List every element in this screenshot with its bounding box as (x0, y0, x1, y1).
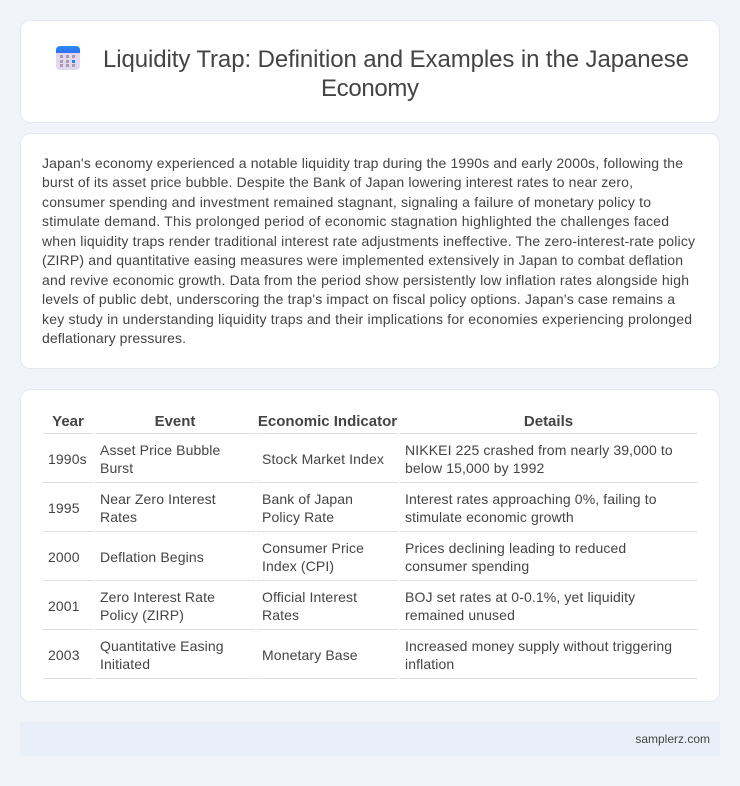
row 1990s: 1990s (48, 451, 87, 467)
data table: Monetary Base (262, 647, 358, 663)
data table: Prices declining leading to reduced (405, 540, 626, 556)
data table: Zero Interest Rate (100, 589, 215, 605)
data table (43, 413, 697, 679)
title: Economy (321, 75, 419, 102)
header: Year: Year (52, 413, 84, 430)
data table: below 15,000 by 1992 (405, 460, 544, 476)
row 2000: 2000 (48, 549, 80, 565)
data table: Rates (262, 607, 299, 623)
data table: Bank of Japan (262, 491, 353, 507)
data table: Initiated (100, 656, 150, 672)
footer credit: samplerz.com (635, 732, 710, 746)
data table: Asset Price Bubble (100, 442, 220, 458)
data table: BOJ set rates at 0-0.1%, yet liquidity (405, 589, 635, 605)
data table: Interest rates approaching 0%, failing to (405, 491, 657, 507)
summary text: consumer spending and investment remained stagnant, signaling a failure of monetary policy to (42, 194, 651, 210)
data table: Policy Rate (262, 509, 334, 525)
row 2003: 2003 (48, 647, 80, 663)
data table: consumer spending (405, 558, 529, 574)
summary text: Japan's economy experienced a notable liquidity trap during the 1990s and early 2000s, following the (42, 155, 683, 171)
data table: Near Zero Interest (100, 491, 216, 507)
header: Event: Event (155, 413, 195, 430)
data table: Index (CPI) (262, 558, 334, 574)
data table: inflation (405, 656, 454, 672)
row 2001: 2001 (48, 598, 80, 614)
icon: calendar (56, 46, 80, 70)
data table: Burst (100, 460, 133, 476)
footer bar (20, 722, 720, 756)
summary text: key study in understanding liquidity traps and their implications for economies experiencing prolonged (42, 311, 692, 327)
summary panel (20, 133, 720, 369)
data table: Rates (100, 509, 137, 525)
summary text: levels of public debt, underscoring the trap's impact on fiscal policy options. Japan's case remains a (42, 291, 675, 307)
data table: stimulate economic growth (405, 509, 574, 525)
data table: Quantitative Easing (100, 638, 224, 654)
summary text: stimulate demand. This prolonged period of economic stagnation highlighted the challenges faced (42, 213, 669, 229)
data table: Policy (ZIRP) (100, 607, 184, 623)
summary text: when liquidity traps render traditional interest rate adjustments ineffective. The zero-interest-rate policy (41, 233, 695, 249)
data table: remained unused (405, 607, 515, 623)
summary text: burst of its asset price bubble. Despite the Bank of Japan lowering interest rates to near zero, (42, 174, 633, 190)
data table: Stock Market Index (262, 451, 384, 467)
data table: Consumer Price (262, 540, 364, 556)
summary text: (ZIRP) and quantitative easing measures were implemented extensively in Japan to combat deflation (42, 252, 683, 268)
data table: Official Interest (262, 589, 357, 605)
data table: Deflation Begins (100, 549, 204, 565)
data table: Increased money supply without triggering (405, 638, 672, 654)
summary text: and revive economic growth. Data from the period show persistently low inflation rates alongside high (42, 272, 689, 288)
table panel (20, 389, 720, 702)
header: Details: Details (524, 413, 573, 430)
row 1995: 1995 (48, 500, 80, 516)
summary text (41, 155, 695, 346)
title: Liquidity Trap: Definition and Examples in the Japanese (103, 46, 689, 73)
header: Economic Indicator: Economic Indicator (258, 413, 397, 430)
summary text: deflationary pressures. (42, 330, 186, 346)
data table: NIKKEI 225 crashed from nearly 39,000 to (405, 442, 673, 458)
title (103, 46, 689, 102)
header panel (20, 20, 720, 123)
